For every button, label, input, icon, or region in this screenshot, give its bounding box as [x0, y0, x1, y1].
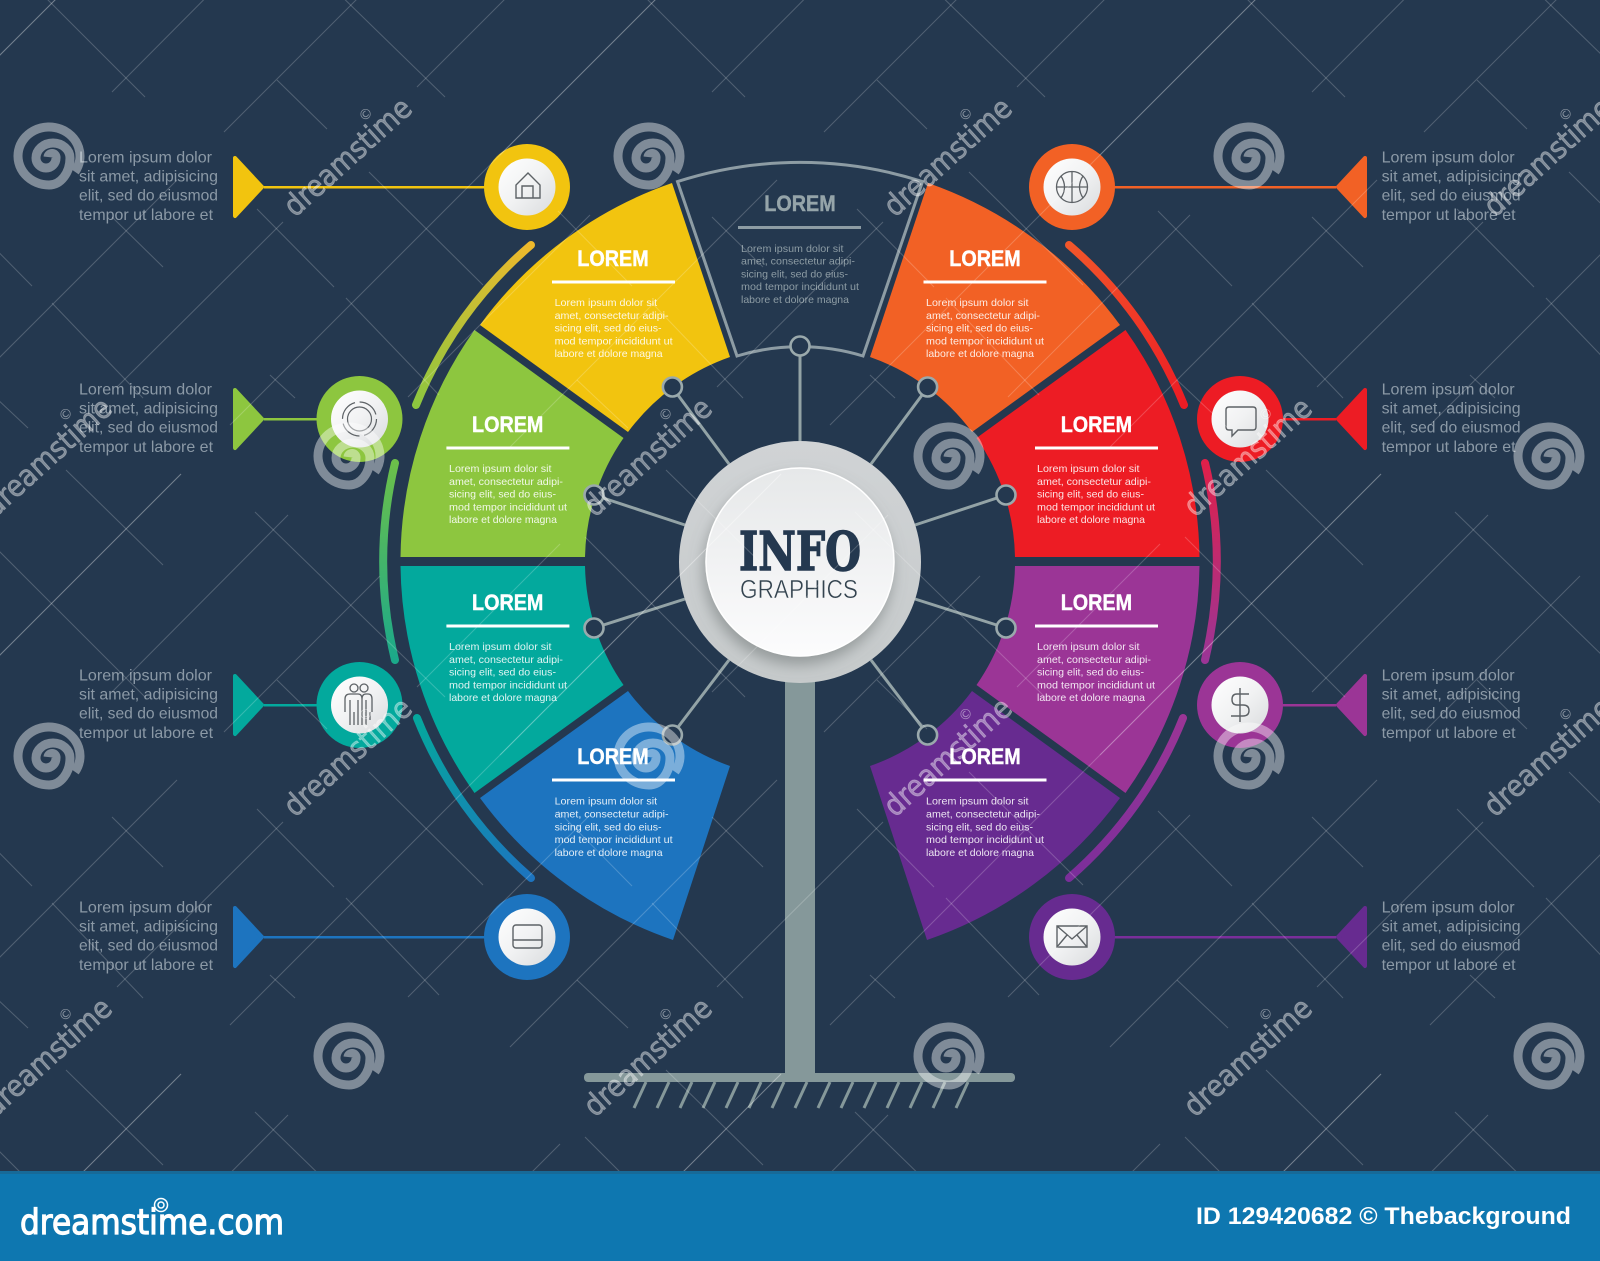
- title: INFO: INFO: [739, 521, 861, 583]
- text block: yellow segment: mod tempor incididunt ut: [555, 335, 673, 347]
- text block: purple side: elit, sed do eiusmod: [1382, 706, 1521, 723]
- text block: yellow segment: sicing elit, sed do eius-: [555, 323, 662, 335]
- text block: yellow side: Lorem ipsum dolor: [79, 150, 213, 166]
- watermark text: dreamstime: [577, 991, 719, 1124]
- text block: yellow side: tempor ut labore et: [79, 207, 214, 224]
- text block: green side: elit, sed do eiusmod: [79, 420, 218, 437]
- text block: teal side: tempor ut labore et: [79, 725, 214, 742]
- text block: teal segment: [449, 641, 567, 704]
- watermark text: ©: [956, 704, 977, 725]
- callout: violet, mail: [1029, 894, 1365, 980]
- text block: purple side: [1382, 668, 1521, 742]
- watermark text: ©: [1256, 1004, 1277, 1025]
- icon: ball: [1056, 172, 1088, 202]
- heading: top segment: LOREM: [764, 191, 836, 216]
- callout: purple, dollar: [1197, 662, 1365, 748]
- panel: teal segment: LOREM: [472, 590, 543, 615]
- footer logo: dreamstime.com: [20, 1203, 284, 1243]
- panel: orange segment: [870, 183, 1120, 432]
- text block: purple segment: [1037, 641, 1155, 704]
- outer thin arcs: [383, 245, 1217, 878]
- hub nodes: [584, 336, 1016, 744]
- text block: green segment: amet, consectetur adipi-: [449, 476, 564, 488]
- watermark text: ©: [56, 404, 77, 425]
- text block: green side: [79, 382, 218, 456]
- icon: dollar: [1231, 688, 1249, 722]
- text block: purple segment: Lorem ipsum dolor sit: [1037, 641, 1140, 653]
- text block: purple side: sit amet, adipisicing: [1382, 687, 1521, 704]
- text block: red side: elit, sed do eiusmod: [1382, 420, 1521, 437]
- text block: blue segment: Lorem ipsum dolor sit: [555, 796, 657, 808]
- text block: blue segment: sicing elit, sed do eius-: [555, 821, 662, 833]
- icon: mail: [1057, 926, 1087, 947]
- watermark text: ©: [1556, 704, 1577, 725]
- text block: teal side: [79, 668, 218, 742]
- watermark text: ©: [56, 1004, 77, 1025]
- text block: orange segment: labore et dolore magna: [926, 348, 1034, 360]
- text block: orange segment: sicing elit, sed do eius-: [926, 323, 1033, 335]
- text block: purple segment: amet, consectetur adipi-: [1037, 654, 1152, 666]
- text block: orange side: [1382, 150, 1521, 224]
- text block: violet segment: [926, 796, 1044, 859]
- icon: card: [513, 925, 542, 948]
- connector lines from hub to nodes: [594, 346, 1006, 735]
- text block: teal side: elit, sed do eiusmod: [79, 706, 218, 723]
- text block: top segment: sicing elit, sed do eius-: [741, 268, 848, 280]
- text block: purple side: Lorem ipsum dolor: [1382, 668, 1515, 684]
- icon: chat: [1226, 407, 1256, 436]
- footer band: [0, 1171, 1600, 1261]
- watermark text: ©: [356, 704, 377, 725]
- text block: blue side: tempor ut labore et: [79, 957, 214, 974]
- watermark text: ©: [956, 104, 977, 125]
- watermark text: dreamstime: [877, 91, 1019, 224]
- text block: red side: sit amet, adipisicing: [1382, 401, 1521, 418]
- text block: red segment: sicing elit, sed do eius-: [1037, 489, 1144, 501]
- text block: yellow side: sit amet, adipisicing: [79, 169, 218, 186]
- text block: orange side: elit, sed do eiusmod: [1382, 188, 1521, 205]
- text block: blue side: Lorem ipsum dolor: [79, 900, 213, 916]
- watermark text: ©: [1256, 404, 1277, 425]
- text block: yellow side: elit, sed do eiusmod: [79, 188, 218, 205]
- text block: purple segment: mod tempor incididunt ut: [1037, 679, 1155, 691]
- text block: red segment: mod tempor incididunt ut: [1037, 501, 1155, 513]
- footer credit: ID 129420682 © Thebackground: [1196, 1203, 1571, 1230]
- text block: blue segment: labore et dolore magna: [555, 847, 663, 859]
- text block: blue side: [79, 900, 218, 974]
- text block: top segment: labore et dolore magna: [741, 294, 849, 306]
- panel: orange segment: LOREM: [949, 246, 1021, 271]
- panel: red segment: [976, 330, 1200, 557]
- text block: blue segment: mod tempor incididunt ut: [555, 834, 673, 846]
- watermark text: ©: [656, 1004, 677, 1025]
- text block: top segment: amet, consectetur adipi-: [741, 256, 856, 268]
- text block: yellow segment: amet, consectetur adipi-: [555, 310, 669, 322]
- text block: top segment: Lorem ipsum dolor sit: [741, 243, 844, 255]
- text block: orange segment: Lorem ipsum dolor sit: [926, 297, 1029, 309]
- watermark text: dreamstime: [877, 691, 1019, 824]
- text block: top segment: [741, 243, 859, 306]
- text block: orange segment: amet, consectetur adipi-: [926, 310, 1041, 322]
- text block: orange side: Lorem ipsum dolor: [1382, 150, 1515, 166]
- text block: violet segment: Lorem ipsum dolor sit: [926, 796, 1029, 808]
- panel: purple segment: LOREM: [1061, 590, 1132, 615]
- text block: teal segment: Lorem ipsum dolor sit: [449, 641, 552, 653]
- text block: purple side: tempor ut labore et: [1382, 725, 1516, 742]
- text block: violet side: elit, sed do eiusmod: [1382, 938, 1521, 955]
- text block: orange side: sit amet, adipisicing: [1382, 169, 1521, 186]
- panel: blue segment: LOREM: [577, 744, 649, 769]
- text block: top segment: mod tempor incididunt ut: [741, 281, 859, 293]
- panel: violet segment: [870, 691, 1120, 940]
- callout: green, cycle: [235, 376, 402, 462]
- panel: blue segment: [480, 691, 730, 940]
- text block: violet segment: sicing elit, sed do eius-: [926, 821, 1033, 833]
- text block: orange segment: mod tempor incididunt ut: [926, 335, 1044, 347]
- text block: violet side: Lorem ipsum dolor: [1382, 900, 1515, 916]
- text block: violet segment: labore et dolore magna: [926, 847, 1034, 859]
- text block: teal segment: sicing elit, sed do eius-: [449, 667, 556, 679]
- text block: teal side: sit amet, adipisicing: [79, 687, 218, 704]
- text block: teal segment: amet, consectetur adipi-: [449, 654, 564, 666]
- text block: violet side: [1382, 900, 1521, 974]
- text block: red side: Lorem ipsum dolor: [1382, 382, 1515, 398]
- text block: yellow segment: labore et dolore magna: [555, 348, 663, 360]
- panel: yellow segment: [480, 183, 730, 432]
- text block: teal segment: mod tempor incididunt ut: [449, 679, 567, 691]
- text block: violet side: tempor ut labore et: [1382, 957, 1516, 974]
- callout: red, chat: [1197, 376, 1365, 462]
- text block: red side: tempor ut labore et: [1382, 439, 1516, 456]
- text block: green segment: sicing elit, sed do eius-: [449, 489, 556, 501]
- text block: red segment: amet, consectetur adipi-: [1037, 476, 1152, 488]
- central hub: [679, 441, 921, 683]
- stand: pole and base: [584, 670, 1015, 1108]
- text block: blue side: sit amet, adipisicing: [79, 919, 218, 936]
- callout: yellow, home: [235, 144, 570, 230]
- watermark text: ©: [1556, 104, 1577, 125]
- text block: green segment: labore et dolore magna: [449, 514, 557, 526]
- watermark text: dreamstime: [277, 691, 419, 824]
- watermark spirals: [18, 127, 1580, 1085]
- text block: green side: sit amet, adipisicing: [79, 401, 218, 418]
- text block: green segment: [449, 463, 567, 526]
- text block: violet segment: amet, consectetur adipi-: [926, 808, 1041, 820]
- icon: logo spiral: [154, 1198, 168, 1212]
- text block: blue segment: amet, consectetur adipi-: [555, 808, 669, 820]
- text block: orange segment: [926, 297, 1044, 360]
- text block: red segment: [1037, 463, 1155, 526]
- text block: green side: Lorem ipsum dolor: [79, 382, 213, 398]
- text block: yellow segment: [555, 297, 673, 360]
- watermark text: dreamstime: [577, 391, 719, 524]
- text block: red segment: labore et dolore magna: [1037, 514, 1145, 526]
- callout: blue, card: [235, 894, 570, 980]
- panel: yellow segment: LOREM: [577, 246, 649, 271]
- text block: teal segment: labore et dolore magna: [449, 692, 557, 704]
- text block: violet side: sit amet, adipisicing: [1382, 919, 1521, 936]
- text block: yellow side: [79, 150, 218, 224]
- title: GRAPHICS: GRAPHICS: [740, 574, 858, 604]
- watermark text: dreamstime: [1177, 391, 1319, 524]
- text block: purple segment: labore et dolore magna: [1037, 692, 1145, 704]
- text block: blue side: elit, sed do eiusmod: [79, 938, 218, 955]
- text block: green segment: mod tempor incididunt ut: [449, 501, 567, 513]
- panel: teal segment: [400, 566, 624, 793]
- panel: top outlined segment: [678, 162, 922, 356]
- callout: orange, ball: [1029, 144, 1365, 230]
- text block: red side: [1382, 382, 1521, 456]
- watermark text: dreamstime: [277, 91, 419, 224]
- icon: home: [516, 173, 540, 198]
- text block: orange side: tempor ut labore et: [1382, 207, 1516, 224]
- panel: red segment: LOREM: [1061, 412, 1132, 437]
- panel: green segment: LOREM: [472, 412, 543, 437]
- panel: green segment: [400, 330, 624, 557]
- text block: purple segment: sicing elit, sed do eius-: [1037, 667, 1144, 679]
- text block: blue segment: [555, 796, 673, 859]
- panel: purple segment: [976, 566, 1200, 793]
- icon: people: [345, 684, 372, 725]
- text block: yellow segment: Lorem ipsum dolor sit: [555, 297, 657, 309]
- text block: teal side: Lorem ipsum dolor: [79, 668, 213, 684]
- text block: violet segment: mod tempor incididunt ut: [926, 834, 1044, 846]
- text block: green segment: Lorem ipsum dolor sit: [449, 463, 552, 475]
- watermark text: dreamstime: [1177, 991, 1319, 1124]
- text block: red segment: Lorem ipsum dolor sit: [1037, 463, 1140, 475]
- callout: teal, people: [235, 662, 402, 748]
- text block: green side: tempor ut labore et: [79, 439, 214, 456]
- icon: cycle: [342, 402, 376, 436]
- panel: violet segment: LOREM: [949, 744, 1021, 769]
- watermark text: ©: [656, 404, 677, 425]
- watermark text: ©: [356, 104, 377, 125]
